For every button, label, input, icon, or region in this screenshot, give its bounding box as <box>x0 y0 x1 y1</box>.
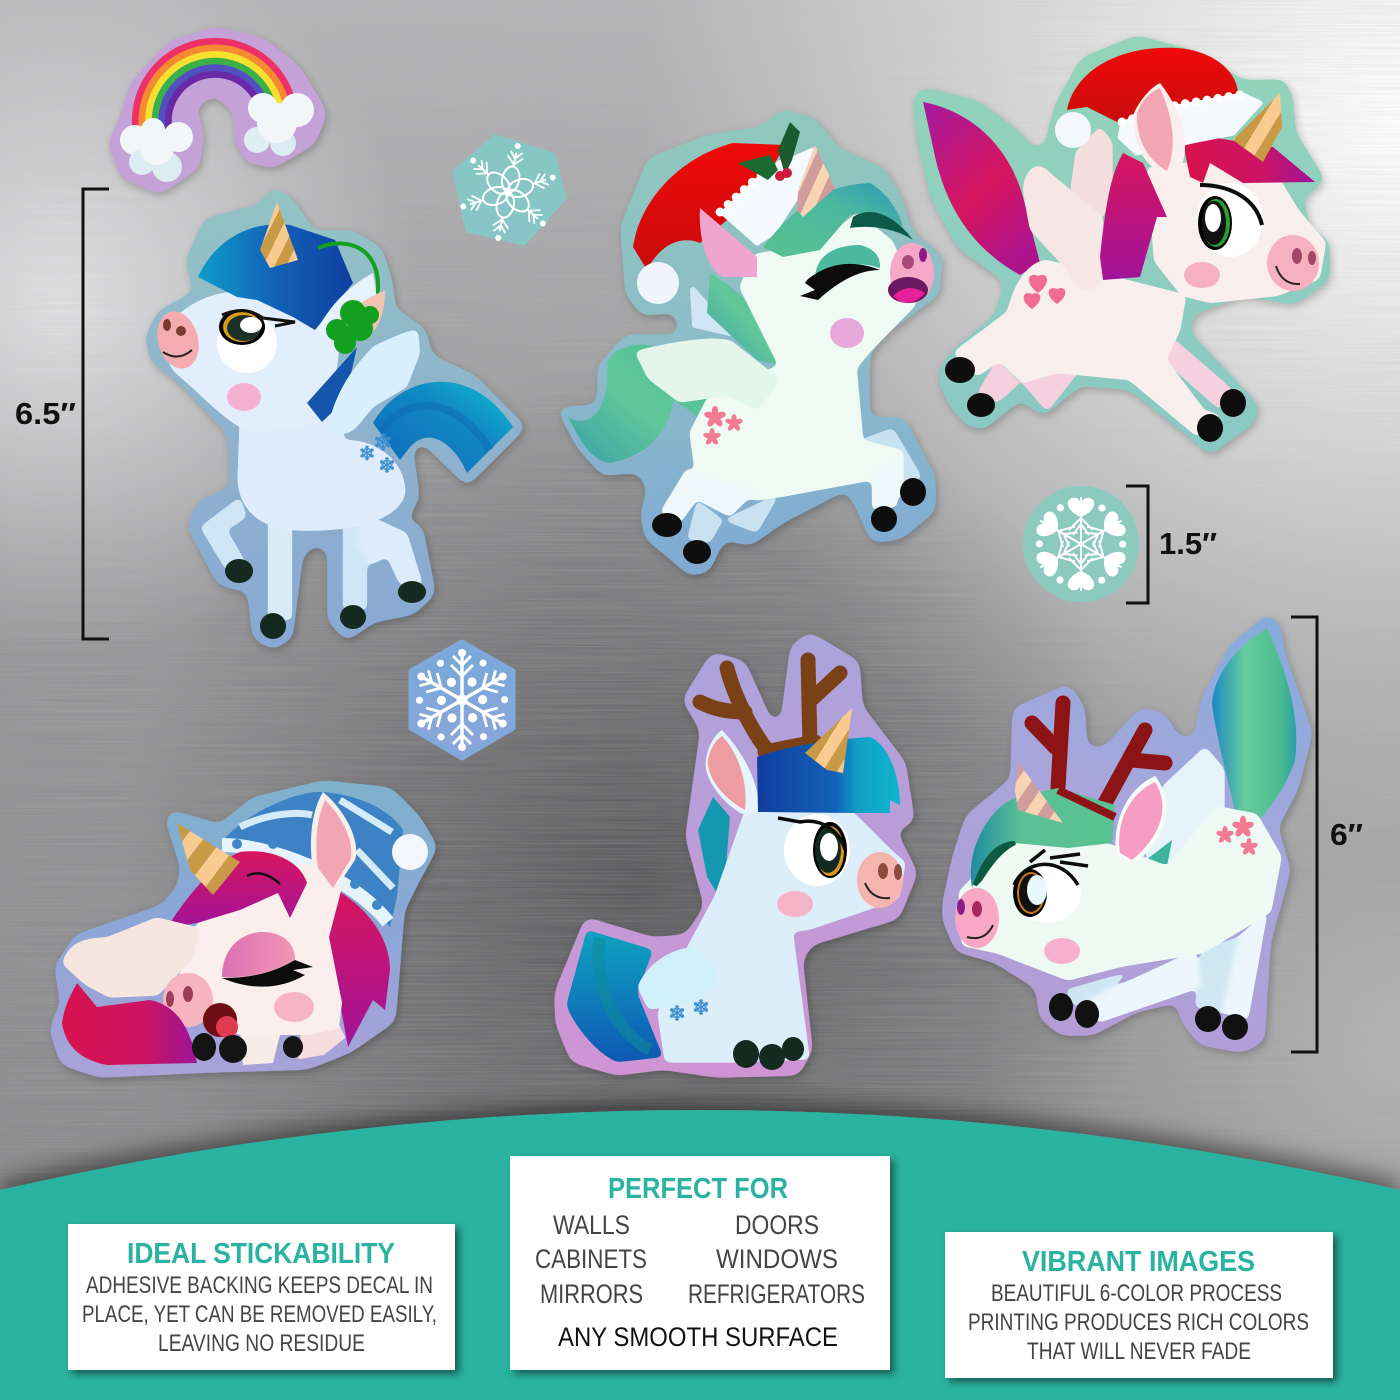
santa hat <box>633 143 785 270</box>
body <box>957 263 1217 433</box>
head <box>1150 163 1323 300</box>
lashes <box>222 960 313 987</box>
neck and body <box>238 400 405 531</box>
sticker: green unicorn with red antlers <box>945 617 1310 1050</box>
head <box>173 866 340 1033</box>
eye <box>1015 863 1081 923</box>
horn <box>177 823 240 895</box>
tail <box>567 930 663 1062</box>
cheek <box>227 383 261 411</box>
cheek <box>777 891 813 917</box>
snowflake decal: teal circle <box>1023 486 1139 602</box>
tail <box>1212 628 1296 820</box>
legs <box>1065 910 1268 1023</box>
wing <box>1148 750 1222 877</box>
flank snowflakes <box>669 999 709 1021</box>
horn <box>260 202 298 268</box>
beanie dots <box>232 839 382 910</box>
back wing <box>1073 130 1110 217</box>
back mane <box>698 797 730 903</box>
antler band <box>1058 790 1115 817</box>
wing <box>638 341 777 407</box>
head and body <box>962 810 1278 977</box>
head and body <box>660 217 913 523</box>
pompom <box>1055 112 1091 148</box>
antlers <box>700 660 840 752</box>
sticker: blue unicorn with earmuffs <box>148 190 523 647</box>
muzzle <box>163 973 213 1027</box>
eye <box>1197 183 1263 257</box>
horn <box>1015 762 1063 823</box>
pompom <box>637 262 679 304</box>
hat fur trim <box>1120 94 1260 153</box>
backing shape <box>148 190 523 647</box>
horn <box>797 145 835 217</box>
hooves <box>225 559 426 639</box>
mane <box>971 788 1115 887</box>
right cloud <box>244 93 314 156</box>
sticker: green unicorn in santa hat <box>560 112 940 573</box>
back wing <box>693 290 730 333</box>
wing <box>65 920 198 995</box>
panel: ideal stickability <box>68 1224 455 1370</box>
dimension: 1.5 inch <box>1126 486 1217 603</box>
panel: ideal stickability: ADHESIVE BACKING KEEPS DECAL IN <box>86 1272 433 1299</box>
forelock <box>1183 137 1315 183</box>
ear <box>700 208 757 277</box>
sticker: pink unicorn in santa hat <box>915 38 1327 452</box>
panel: perfect for: ANY SMOOTH SURFACE <box>558 1322 838 1352</box>
earmuff <box>326 300 379 354</box>
backing shape <box>557 635 915 1075</box>
panel: perfect for <box>510 1156 890 1370</box>
antlers <box>1032 703 1165 803</box>
back legs <box>977 338 1233 410</box>
hooves <box>652 478 926 564</box>
panel: ideal stickability: PLACE, YET CAN BE REMOVED EASILY, <box>82 1301 437 1328</box>
panel: ideal stickability: IDEAL STICKABILITY <box>127 1238 395 1270</box>
wing <box>1023 166 1103 290</box>
panel: ideal stickability: LEAVING NO RESIDUE <box>158 1330 365 1357</box>
flank flowers <box>1216 816 1258 856</box>
wing <box>328 330 420 434</box>
panel: vibrant images: PRINTING PRODUCES RICH COLORS <box>968 1309 1309 1336</box>
hooves <box>192 1033 303 1063</box>
dimension: 6.5 inch: 6.5″ <box>15 396 76 431</box>
back legs <box>687 428 922 543</box>
flank snowflakes <box>360 433 395 473</box>
panel: vibrant images: BEAUTIFUL 6-COLOR PROCESS <box>991 1280 1282 1307</box>
mouth <box>888 277 928 303</box>
ear <box>311 792 356 893</box>
hooves <box>733 1037 804 1070</box>
panel: perfect for: PERFECT FOR <box>608 1173 788 1205</box>
mouth <box>203 1003 237 1037</box>
horn <box>1233 93 1282 162</box>
muzzle <box>151 307 205 373</box>
snowflake decal: blue hexagon <box>406 642 518 758</box>
dimension: 6 inch: 6″ <box>1330 817 1363 852</box>
back mane <box>1142 840 1172 907</box>
tail <box>923 102 1040 275</box>
mane <box>757 737 900 813</box>
legs <box>200 497 423 620</box>
snowflake decal: teal hexagon <box>451 133 565 251</box>
ear <box>1134 83 1185 173</box>
flank hearts <box>1024 275 1065 309</box>
muzzle <box>955 888 999 948</box>
muzzle <box>857 852 903 908</box>
legs <box>240 1017 343 1065</box>
panel: perfect for: MIRRORS <box>540 1279 643 1309</box>
hat fur trim <box>720 150 813 243</box>
cheek <box>1044 938 1080 964</box>
ear <box>706 730 760 814</box>
dimension: 6.5 inch <box>15 189 109 639</box>
muzzle <box>1267 235 1319 291</box>
cheek <box>274 992 314 1022</box>
ear <box>1115 776 1167 866</box>
sticker: blue unicorn with antlers <box>557 635 915 1075</box>
panel: vibrant images: VIBRANT IMAGES <box>1022 1246 1255 1278</box>
eye <box>784 814 850 886</box>
hooves <box>1049 993 1248 1040</box>
panel: perfect for: CABINETS <box>535 1244 647 1274</box>
closed eyelid <box>222 932 295 977</box>
head and body <box>660 812 903 1060</box>
wing <box>640 950 717 1007</box>
backing shape <box>560 112 940 573</box>
panel: perfect for: DOORS <box>735 1210 819 1240</box>
horn <box>805 708 852 773</box>
dimension: 6 inch <box>1291 617 1363 1052</box>
backing shape <box>945 617 1310 1050</box>
backing shape <box>52 783 435 1075</box>
eye shadow and closed eye <box>815 245 880 280</box>
right mane <box>327 890 390 1047</box>
back mane <box>707 273 790 367</box>
backing shape <box>915 38 1327 452</box>
panel: perfect for: WINDOWS <box>716 1244 838 1274</box>
eye <box>217 313 277 373</box>
beanie <box>223 792 403 927</box>
holly <box>738 122 800 181</box>
top mane <box>167 851 307 928</box>
flank flowers <box>703 406 743 446</box>
tail <box>373 382 513 473</box>
dimension: 1.5 inch: 1.5″ <box>1159 526 1217 561</box>
left cloud <box>120 118 193 182</box>
mane <box>1100 153 1167 280</box>
head <box>160 293 337 430</box>
muzzle <box>890 243 934 303</box>
teal footer band <box>0 1110 1400 1400</box>
mane <box>198 224 353 330</box>
tail <box>568 345 707 463</box>
neck mane <box>307 347 357 422</box>
hooves <box>945 357 1246 442</box>
panel: perfect for: WALLS <box>553 1210 630 1240</box>
ear <box>317 273 377 340</box>
santa hat <box>1067 48 1238 125</box>
panel: vibrant images <box>945 1232 1333 1378</box>
pompom <box>392 834 428 870</box>
sticker: rainbow <box>110 29 325 192</box>
top mane <box>763 183 903 257</box>
tail <box>62 983 197 1065</box>
cheek <box>1184 262 1220 288</box>
panel: perfect for: REFRIGERATORS <box>688 1279 865 1309</box>
sticker: sleeping pink unicorn in beanie <box>52 783 435 1075</box>
panel: vibrant images: THAT WILL NEVER FADE <box>1027 1338 1251 1365</box>
cheek <box>830 318 864 348</box>
earmuff band <box>318 243 378 307</box>
